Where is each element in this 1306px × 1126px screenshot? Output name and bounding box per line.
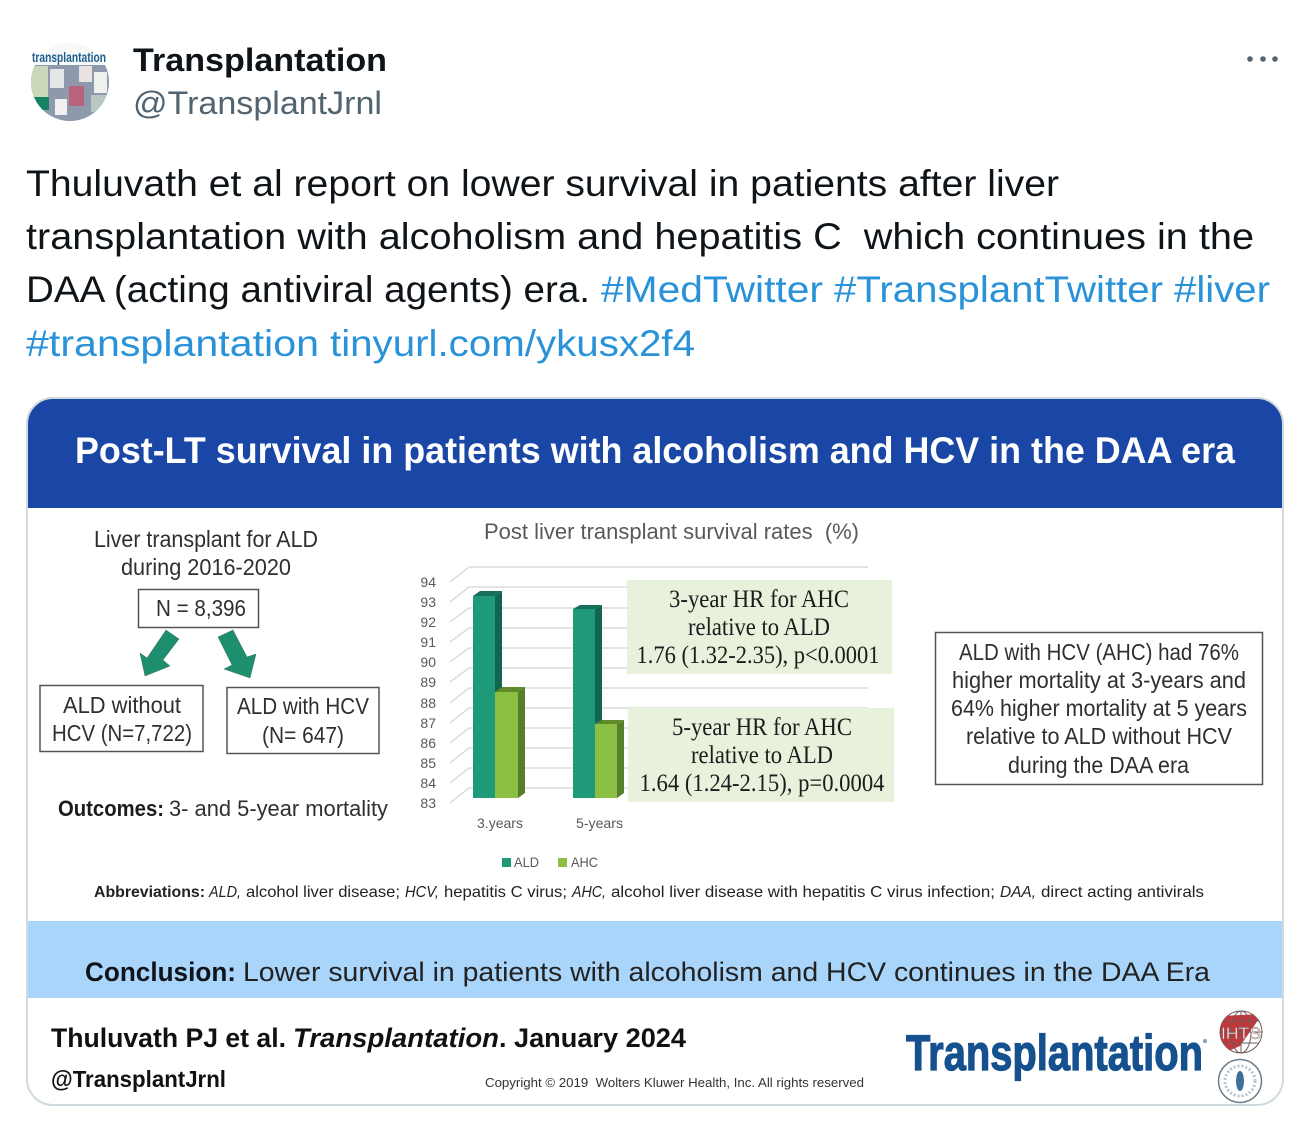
- abbreviations: [94, 884, 1204, 901]
- summary box: [936, 632, 1262, 784]
- bar: ALD 3 years: [473, 591, 502, 798]
- summary box: 64% higher mortality at 5 years: [951, 695, 1247, 721]
- outcomes text: [58, 796, 388, 821]
- flow diagram: patient selection: N = 8,396: [156, 595, 246, 621]
- callout: 5-year hazard ratio: 1.64 (1.24-2.15), p=0.0004: [640, 770, 885, 797]
- citation: January 2024: [514, 1023, 686, 1053]
- bar chart: survival rates: 89: [420, 674, 436, 690]
- panel: conclusion band: [27, 921, 1283, 998]
- chart legend: ALD: [514, 854, 539, 870]
- outcomes text: 3- and 5-year mortality: [169, 796, 388, 821]
- abbreviations: Abbreviations:: [94, 884, 205, 901]
- callout: 5-year hazard ratio: relative to ALD: [691, 742, 833, 769]
- abbreviations: alcohol liver disease with hepatitis C virus infection;: [611, 884, 995, 901]
- bar chart: survival rates: 94: [420, 574, 436, 590]
- tweet text: [26, 163, 1270, 364]
- flow diagram: patient selection: [40, 526, 379, 754]
- chart title: Post liver transplant survival rates (%): [484, 519, 859, 544]
- author handle: @TransplantJrnl: [133, 85, 382, 121]
- title: Post-LT survival in patients with alcoholism and HCV in the DAA era: [75, 430, 1235, 471]
- arrow: to ALD without HCV: [140, 630, 179, 676]
- flow diagram: patient selection: Liver transplant for ALD: [94, 526, 318, 552]
- callout: 3-year hazard ratio: 1.76 (1.32-2.35), p<0.0001: [636, 642, 880, 669]
- abbreviations: hepatitis C virus;: [444, 884, 567, 901]
- tweet text: transplantation with alcoholism and hepatitis C which continues in the: [26, 216, 1254, 257]
- tweet text: #transplantation: [26, 323, 319, 364]
- flow diagram: patient selection: HCV (N=7,722): [52, 720, 192, 746]
- bar chart: survival rates: 88: [420, 695, 436, 711]
- abbreviations: HCV,: [405, 884, 439, 901]
- flow diagram: patient selection: (N= 647): [262, 722, 344, 748]
- abbreviations: ALD,: [208, 884, 241, 901]
- summary box: relative to ALD without HCV: [966, 723, 1233, 749]
- bar chart: survival rates: 84: [420, 775, 436, 791]
- bar chart: survival rates: 87: [420, 715, 436, 731]
- callout: 3-year hazard ratio: [627, 580, 892, 674]
- summary box: higher mortality at 3-years and: [952, 667, 1246, 693]
- bar chart: survival rates: 92: [420, 614, 436, 630]
- chart legend: AHC: [571, 854, 598, 870]
- panel: infographic card: [27, 398, 1283, 1105]
- icon: society seal: [1218, 1060, 1262, 1102]
- chart legend: [502, 854, 598, 870]
- citation: Transplantation: [293, 1023, 499, 1053]
- tweet text: #MedTwitter: [601, 269, 823, 310]
- icon: IHTS seal: [1220, 1011, 1262, 1053]
- panel: title banner: [27, 398, 1283, 508]
- bar chart: survival rates: 3.years: [477, 815, 523, 831]
- bar: ALD 5 years: [573, 605, 602, 798]
- outcomes text: Outcomes:: [58, 796, 164, 821]
- tweet text: DAA (acting antiviral agents) era.: [26, 269, 590, 310]
- bar: AHC 5 years: [595, 720, 624, 798]
- callout: 3-year hazard ratio: relative to ALD: [688, 614, 830, 641]
- abbreviations: AHC,: [571, 884, 606, 901]
- citation: .: [499, 1023, 507, 1053]
- bar chart: survival rates: 93: [420, 594, 436, 610]
- logo: Transplantation wordmark: Transplantation: [906, 1025, 1203, 1081]
- bar chart: survival rates: 85: [420, 755, 436, 771]
- summary box: during the DAA era: [1008, 752, 1189, 778]
- journal handle: @TransplantJrnl: [51, 1066, 226, 1092]
- citation: [51, 1023, 686, 1053]
- conclusion: Lower survival in patients with alcoholism and HCV continues in the DAA Era: [243, 957, 1211, 987]
- copyright: Copyright © 2019 Wolters Kluwer Health, Inc. All rights reserved: [485, 1075, 864, 1090]
- flow diagram: patient selection: during 2016-2020: [121, 554, 291, 580]
- bar chart: survival rates: 86: [420, 735, 436, 751]
- bar chart: survival rates: [420, 567, 868, 870]
- author name: Transplantation: [133, 42, 387, 78]
- tweet text: #liver: [1174, 269, 1270, 310]
- icon: journal avatar: [31, 52, 109, 121]
- flow diagram: patient selection: ALD with HCV: [237, 693, 370, 719]
- callout: 5-year hazard ratio: [628, 708, 894, 802]
- bar chart: survival rates: 83: [420, 795, 436, 811]
- bar chart: survival rates: 91: [420, 634, 436, 650]
- arrow: to ALD with HCV: [218, 630, 256, 678]
- conclusion: Conclusion:: [85, 957, 236, 987]
- icon: journal avatar: transplantation: [32, 49, 106, 65]
- citation: Thuluvath PJ et al.: [51, 1023, 286, 1053]
- bar chart: survival rates: 90: [420, 654, 436, 670]
- callout: 5-year hazard ratio: 5-year HR for AHC: [672, 714, 852, 741]
- abbreviations: alcohol liver disease;: [246, 884, 400, 901]
- icon: more menu dots: [1247, 56, 1278, 62]
- tweet text: #TransplantTwitter: [834, 269, 1163, 310]
- bar: AHC 3 years: [495, 687, 525, 798]
- callout: 3-year hazard ratio: 3-year HR for AHC: [669, 586, 849, 613]
- bar chart: survival rates: 5-years: [576, 815, 623, 831]
- tweet text: tinyurl.com/ykusx2f4: [330, 323, 695, 364]
- flow diagram: patient selection: ALD without: [63, 692, 182, 718]
- abbreviations: DAA,: [1000, 884, 1036, 901]
- abbreviations: direct acting antivirals: [1041, 884, 1204, 901]
- summary box: ALD with HCV (AHC) had 76%: [959, 639, 1239, 665]
- icon: IHTS seal: IHTS: [1221, 1024, 1261, 1043]
- tweet text: Thuluvath et al report on lower survival in patients after liver: [26, 163, 1059, 204]
